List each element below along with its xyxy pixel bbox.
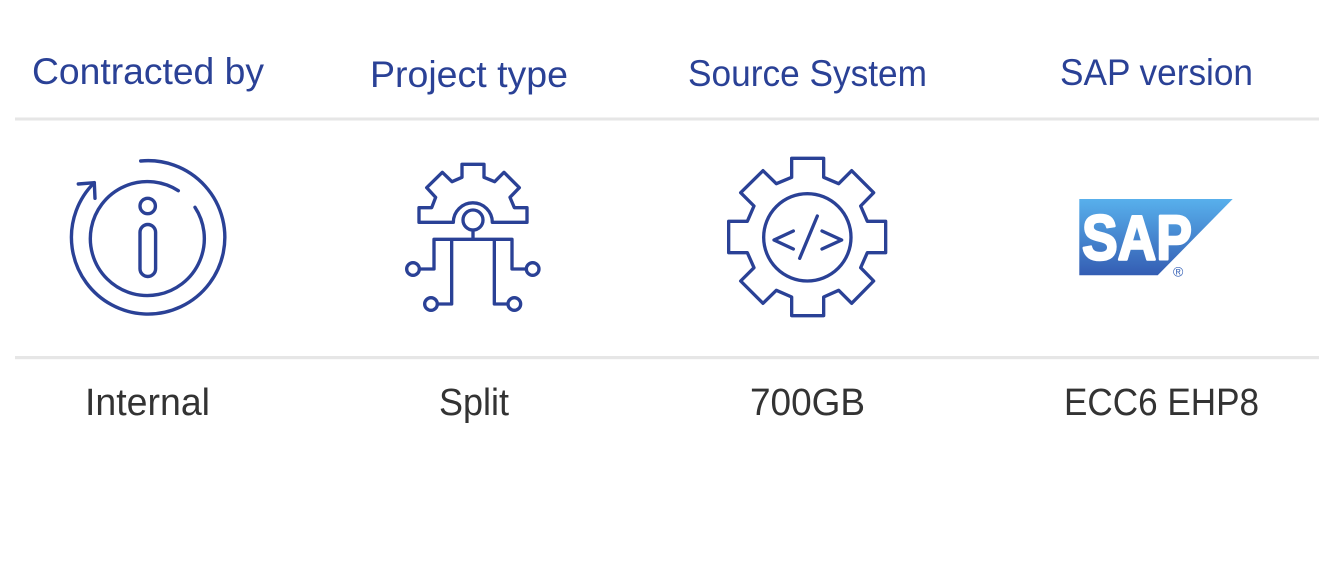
value: 700GB: 700GB (750, 382, 865, 424)
value: Internal: Internal (85, 382, 210, 424)
icon: gear with circuit lines (407, 164, 539, 310)
icon: SAP logo: SAP (1082, 204, 1192, 274)
value: ECC6 EHP8: ECC6 EHP8 (1064, 382, 1259, 424)
heading: SAP version: SAP version (1060, 52, 1253, 93)
icon: SAP logo: ® (1173, 264, 1184, 280)
heading: Project type: Project type (370, 54, 568, 95)
heading: Contracted by: Contracted by (32, 51, 264, 92)
icon: info with circular arrow (71, 161, 225, 314)
icon: gear with code brackets (729, 158, 886, 316)
heading: Source System: Source System (688, 53, 927, 94)
value: Split: Split (439, 382, 509, 424)
